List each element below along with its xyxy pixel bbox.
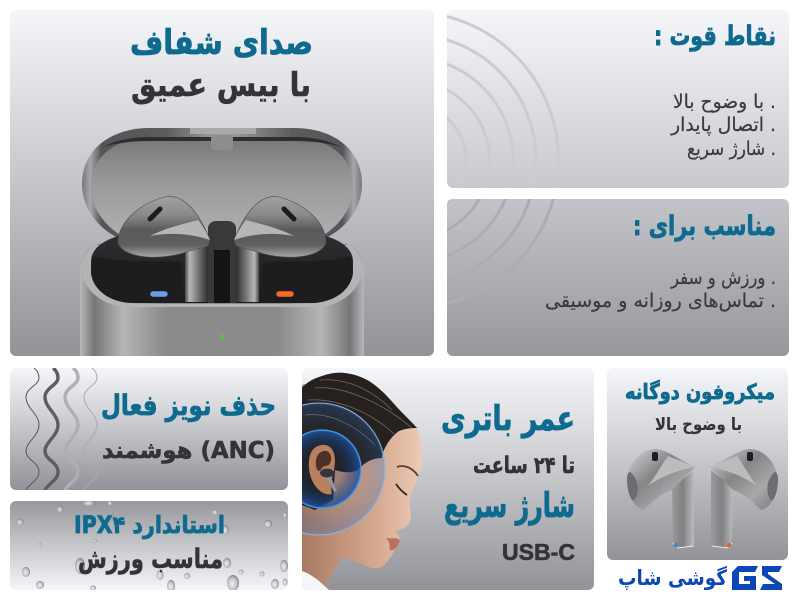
panel: suitable for [447,199,789,356]
panel: active noise cancellation [10,368,288,490]
water drops [16,500,288,592]
subheading: with deep bass: با بیس عمیق [131,65,311,105]
illustration: woman wearing earbud [302,372,422,590]
subheading: smart ANC: (ANC) هوشمند [102,438,275,464]
panel: clear sound hero [10,10,434,356]
left earbud [118,197,210,302]
hair [302,373,417,510]
right earbud product [710,449,778,549]
heading: dual microphone: میکروفون دوگانه [625,379,775,404]
right earbud [234,197,326,302]
list: suitable for [545,267,776,312]
outer sound circle [302,402,386,536]
heading: battery life: عمر باتری [441,399,575,439]
closed eye and brow [396,484,407,495]
list: strengths: . شارژ سریع [687,138,776,160]
shirt [302,571,329,590]
logo wordmark: گوشی شاپ [618,565,728,590]
left earbud product [627,449,695,549]
left blue indicator [150,291,168,297]
heading: fast charging: شارژ سریع [444,486,575,526]
panel: battery life [302,368,594,590]
earbud in ear [320,468,337,492]
subheading: suitable for sport: مناسب ورزش [78,544,223,575]
heading: clear sound: صدای شفاف [130,23,313,63]
inner sound circle [302,429,362,509]
list: suitable for: . ورزش و سفر [670,267,776,289]
list: strengths [670,91,776,160]
icon: sound waves [26,368,97,490]
list: strengths: . اتصال پایدار [670,114,776,136]
ear [309,445,335,494]
logo: Gooshi Shop [618,565,782,590]
subheading: USB-C: USB-C [502,539,575,565]
logo mark [732,566,782,590]
panel: strengths [447,10,789,188]
list: strengths: . با وضوح بالا [673,91,776,113]
subheading: high clarity: با وضوح بالا [655,415,742,435]
green status light [220,335,224,339]
heading: active noise cancellation: حذف نویز فعال [101,389,276,422]
panel: IPX4 rating [10,500,288,592]
subheading: up to 24 hours: تا ۲۴ ساعت [473,453,575,479]
heading: IPX4 standard: استاندارد IPX۴ [74,511,225,539]
illustration: open earbud case [80,128,364,356]
right orange indicator [276,291,294,297]
panel: dual microphone [607,368,788,560]
list: suitable for: . تماس‌های روزانه و موسیقی [545,290,776,312]
